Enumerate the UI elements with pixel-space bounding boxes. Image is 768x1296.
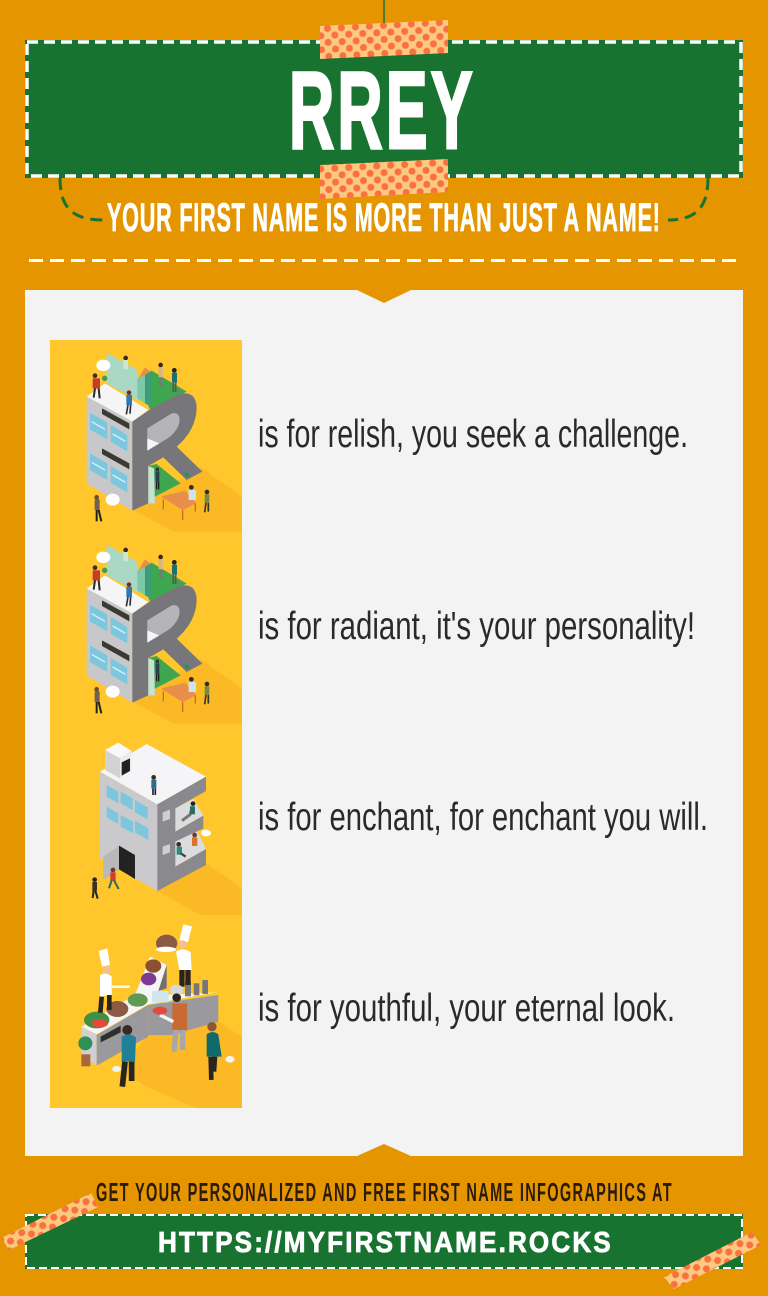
footer call to action: GET YOUR PERSONALIZED AND FREE FIRST NAME INFOGRAPHICS AT	[96, 1179, 672, 1207]
panel: name letters	[25, 290, 743, 1156]
illustration column	[50, 340, 242, 1108]
footer URL banner	[25, 1214, 743, 1269]
tape: banner top	[320, 20, 448, 59]
subtitle: YOUR FIRST NAME IS MORE THAN JUST A NAME!	[107, 195, 660, 240]
icon: buffet counter for letter Y	[78, 924, 242, 1108]
hanging thread	[383, 0, 385, 24]
name title: RREY	[289, 48, 473, 171]
icon: second letter R building	[87, 545, 242, 724]
icon: letter E building	[92, 743, 242, 915]
tape: footer left	[2, 1193, 98, 1250]
dashed connector right	[668, 178, 708, 220]
divider	[29, 259, 739, 262]
tape: banner bottom	[320, 159, 448, 199]
footer URL: HTTPS://MYFIRSTNAME.ROCKS	[158, 1226, 611, 1258]
title banner	[25, 40, 743, 178]
icon: letter R building	[87, 353, 242, 532]
tape: footer right	[664, 1232, 761, 1289]
dashed connector left	[60, 178, 103, 220]
